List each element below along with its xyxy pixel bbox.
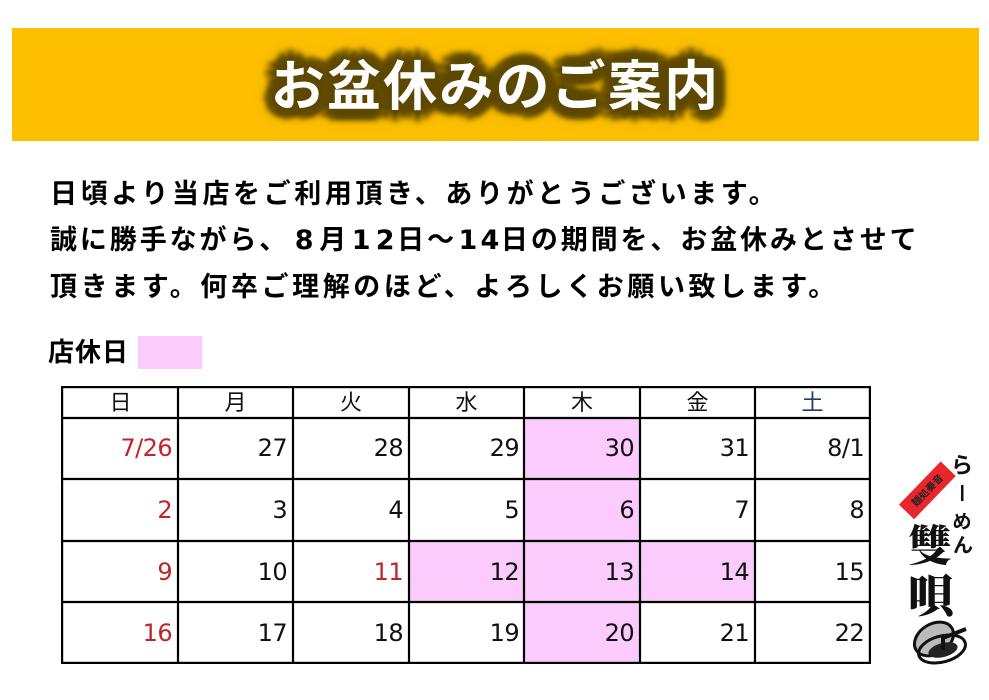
bowl and chopsticks icon [908, 615, 969, 668]
week 1: 8/1 [827, 434, 864, 462]
line 2: 2 [376, 225, 394, 256]
week 2: 4 [388, 496, 403, 524]
week 2: 8 [849, 496, 864, 524]
week 3: 11 [374, 558, 403, 586]
weekday headers [109, 385, 824, 417]
week 4 [143, 619, 864, 647]
week 1: 30 [605, 434, 634, 462]
week 4: 17 [258, 619, 287, 647]
week 1: 31 [720, 434, 749, 462]
weekday headers: 水 [455, 385, 478, 417]
week 4: 20 [605, 619, 634, 647]
week 4: 16 [143, 619, 172, 647]
week 2 [157, 496, 864, 524]
legend: closed day [48, 332, 202, 369]
logo vertical text [908, 448, 973, 626]
weekday headers: 月 [224, 385, 246, 417]
weekday headers: 火 [340, 385, 362, 417]
logo vertical text: 唄 [908, 560, 958, 626]
line 1: 日頃より当店をご利用頂き、ありがとうございます。 [50, 172, 779, 211]
logo vertical text: め [952, 507, 972, 534]
weekday headers: 木 [571, 385, 593, 417]
week 2: 2 [157, 496, 172, 524]
week 3: 13 [605, 558, 634, 586]
week 3: 14 [720, 558, 749, 586]
title: お盆休みのご案内 [271, 42, 720, 121]
calendar [61, 385, 871, 664]
pink highlighted days and grid [61, 386, 871, 664]
weekday headers: 日 [109, 385, 132, 417]
week 3 [157, 558, 864, 586]
weekday headers: 土 [801, 385, 824, 417]
week 4: 18 [374, 619, 403, 647]
shop logo [899, 448, 973, 664]
line 2: 1 [459, 225, 477, 256]
week 1: 27 [258, 434, 287, 462]
week 1: 29 [490, 434, 519, 462]
week 4: 22 [835, 619, 864, 647]
week 3: 12 [490, 558, 519, 586]
line 3: 頂きます。何卒ご理解のほど、よろしくお願い致します。 [50, 265, 839, 304]
weekday headers: 金 [686, 385, 708, 417]
week 2: 7 [734, 496, 749, 524]
week 2: 3 [272, 496, 287, 524]
week 3: 9 [157, 558, 172, 586]
red stamp: 麺処奏音 [907, 470, 946, 509]
banner [12, 28, 979, 141]
week 4: 21 [720, 619, 749, 647]
line 2: 誠に勝手ながら、 月 日～ 日の期間を、お盆休みとさせて [50, 218, 920, 257]
legend swatch [138, 336, 202, 369]
week 2: 6 [619, 496, 634, 524]
red stamp [899, 461, 956, 519]
week 1 [120, 434, 864, 462]
week 3: 15 [835, 558, 864, 586]
greeting text block [50, 172, 920, 304]
line 2: 4 [481, 225, 499, 256]
line 2: 8 [295, 225, 314, 256]
week 1: 7/26 [120, 434, 172, 462]
logo vertical text: 雙 [908, 513, 952, 574]
line 2: 1 [352, 225, 370, 256]
logo vertical text: ら [951, 448, 973, 480]
week 2: 5 [504, 496, 519, 524]
week 3: 10 [258, 558, 287, 586]
week 1: 28 [374, 434, 403, 462]
week 4: 19 [490, 619, 519, 647]
logo vertical text: ん [953, 529, 973, 558]
legend label: 店休日 [48, 332, 129, 369]
